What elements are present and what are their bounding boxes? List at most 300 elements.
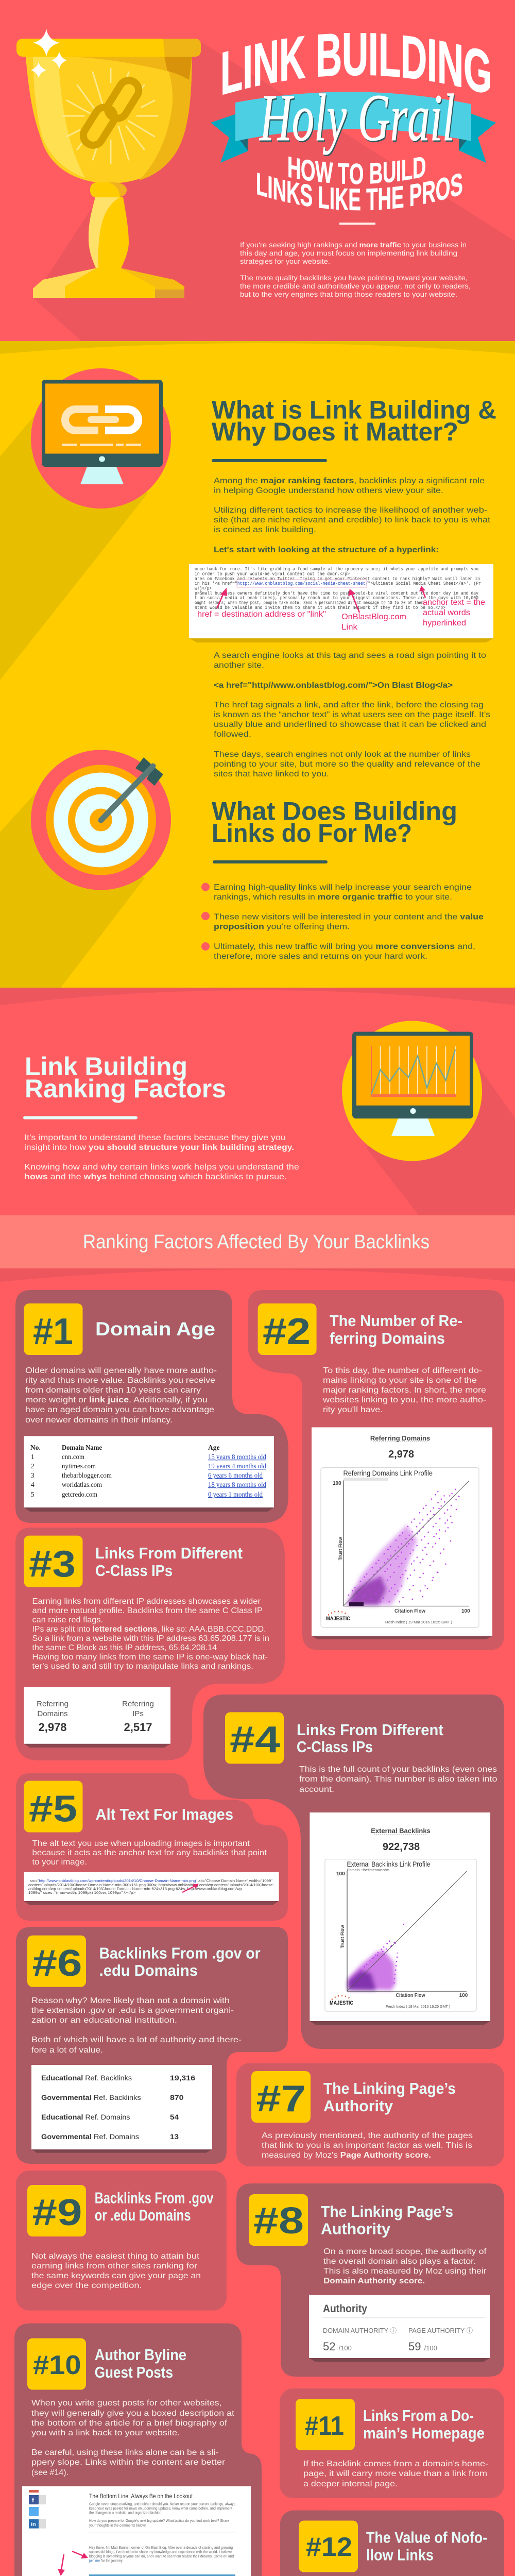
title: Link Building — [220, 20, 492, 108]
card: authority scores — [309, 2295, 490, 2362]
screenshot: alt text code: 1099w" sizes="(max-width: 1099px) 100vw, 1099px" /></p> — [28, 1891, 135, 1895]
table: domain ages: 18 years 8 months old — [208, 1481, 266, 1488]
heading: Guest Posts — [95, 2363, 173, 2381]
chart: external backlinks link profile: 100 — [459, 1993, 468, 1998]
text block: intro: strategies for your website. — [240, 258, 330, 265]
chart: referring domains link profile: 2,978 — [388, 1449, 414, 1460]
subtitle: Links like the pros — [256, 165, 463, 217]
body text: and more natural profile. Backlinks from the same C Class IP — [32, 1606, 263, 1615]
badge #11: #11 — [305, 2411, 344, 2441]
subtitle: How to build — [287, 150, 426, 191]
table: gov and edu backlinks: Governmental Ref. Domains — [41, 2132, 139, 2141]
body text: rity you'll have. — [323, 1405, 383, 1414]
panel: factor 7 linking page authority — [236, 2063, 504, 2166]
screenshot: hyperlink structure: hyperlinked — [423, 619, 466, 628]
badge #4 — [225, 1712, 284, 1764]
panel: factor 5 alt text — [16, 1773, 288, 1921]
screenshot: hyperlink structure: OnBlastBlog.com — [341, 613, 406, 621]
subtitle: Links like the pros: N — [273, 171, 286, 209]
table: gov and edu backlinks: Governmental Ref. Backlinks — [41, 2093, 141, 2102]
heading: .edu Domains — [99, 1961, 198, 1979]
body text: ppery slope. Links within the content are better — [31, 2458, 226, 2467]
heading: or .edu Domains — [95, 2206, 191, 2224]
body text: Not always the easiest thing to attain but — [31, 2252, 200, 2261]
panel: factor 11 homepage links — [280, 2388, 504, 2498]
table: domain ages: worldatlas.com — [62, 1481, 102, 1488]
icon: target with arrow — [31, 750, 171, 890]
badge #12 — [299, 2520, 358, 2572]
heading: what is link building — [212, 396, 496, 462]
table: domain ages: 4 — [31, 1481, 35, 1488]
bullet list: benefits: These new visitors will be interested in your content and the value — [214, 913, 484, 921]
chart: external backlinks link profile: 100 — [336, 1871, 345, 1877]
stats: referring domains and IPs: IPs — [132, 1709, 144, 1718]
text block: anchor text explanation: pointing to your site, but more so the quality and relevance of the — [214, 760, 480, 769]
body text: the same C Block as this IP address, 65.64.208.14 — [32, 1643, 217, 1652]
text block: what is link building: is coined as link building. — [214, 526, 316, 534]
body text: The alt text you use when uploading images is important — [32, 1839, 250, 1848]
table: gov and edu backlinks: Educational Ref. Backlinks — [41, 2074, 132, 2082]
heading — [363, 2406, 485, 2442]
body text — [25, 1366, 217, 1425]
stats: referring domains and IPs: 2,978 — [38, 1721, 67, 1734]
title: Link Building: I — [243, 32, 253, 102]
badge #3: #3 — [29, 1544, 76, 1585]
body text: they will generally give you a boxed description at — [31, 2409, 235, 2418]
body text — [299, 1765, 497, 1794]
text block: anchor text explanation: The href tag signals a link, and after the link, before the closing tag — [214, 701, 484, 709]
body text: account. — [299, 1785, 334, 1794]
table: gov and edu backlinks: 19,316 — [170, 2074, 195, 2082]
title: Link Building: B — [316, 20, 342, 90]
chart: referring domains link profile: Fresh Index ( 19 Mar 2016 16:25 GMT ) — [385, 1621, 452, 1624]
body text: When you write guest posts for other websites, — [31, 2399, 221, 2408]
subtitle: Links like the pros: L — [318, 180, 330, 216]
table: domain ages: No. — [30, 1444, 41, 1451]
body text: Older domains will generally have more autho- — [25, 1366, 217, 1375]
badge #2: #2 — [263, 1311, 311, 1352]
screenshot: alt text code — [24, 1872, 279, 1905]
subtitle: How to build: B — [369, 157, 383, 190]
heading: Backlinks From .gov or — [99, 1944, 261, 1962]
screenshot: alt text code: src="http://www.onblastblog.com/wp-content/uploads/2014/10/Choose-Domain-Name-min.png " alt="Choose Domain Name" width="1099" — [30, 1879, 273, 1883]
subtitle: Links like the pros: T — [366, 182, 378, 217]
body text: If the Backlink comes from a domain's home- — [303, 2460, 488, 2468]
body text: to your image. — [32, 1858, 87, 1867]
table: gov and edu backlinks: 54 — [170, 2113, 179, 2121]
body text: On a more broad scope, the authority of — [323, 2247, 487, 2256]
screenshot: hyperlink structure: p>Small business owners definitely don't have the time to push would-be viral content out the door day in and day — [195, 591, 479, 596]
body text: To this day, the number of different do- — [323, 1366, 482, 1375]
text block: ranking factors intro — [24, 1133, 299, 1181]
text block: anchor text explanation: is known as the “anchor text” is what users see on the page itself. It's — [214, 710, 490, 719]
chart: external backlinks link profile: Citation Flow — [396, 1993, 425, 1998]
table: gov and edu backlinks: 13 — [170, 2132, 179, 2141]
title: Link Building: K — [279, 23, 305, 94]
title: Link Building: U — [342, 21, 368, 88]
subtitle: How to build: U — [383, 156, 396, 190]
body text: websites linking to you, the more autho- — [322, 1396, 486, 1404]
text block: what is link building: Among the major ranking factors , backlinks play a significant role — [214, 477, 485, 485]
heading: Alt Text For Images — [96, 1805, 233, 1823]
panel: factor 8 domain authority — [236, 2183, 504, 2377]
body text — [262, 2131, 473, 2160]
body text: a deeper internal page. — [303, 2480, 398, 2488]
screenshot: hyperlink structure: href = destination address or "link" — [197, 610, 326, 619]
table: domain ages: getcredo.com — [62, 1490, 97, 1498]
heading: what does building links do: Links do For Me? — [212, 819, 412, 848]
body text — [323, 2247, 487, 2285]
title: Link Building: N — [253, 27, 279, 99]
body text — [322, 1366, 486, 1414]
heading — [95, 1544, 243, 1580]
heading — [95, 2346, 186, 2381]
bullet list: benefits: Earning high-quality links will help increase your search engine — [214, 883, 472, 892]
body text — [303, 2460, 488, 2488]
screenshot: author bio: in — [31, 2521, 36, 2528]
badge #9 — [27, 2185, 86, 2236]
subtitle: How to build: D — [413, 150, 426, 185]
chart: referring domains link profile: Referring Domains — [370, 1434, 430, 1442]
body text: you with a link back to your website. — [31, 2429, 180, 2437]
body text: ter's used to and still try to manipulate links and rankings. — [32, 1662, 253, 1671]
body text: over newer domains in their infancy. — [25, 1416, 173, 1425]
badge #1: #1 — [33, 1311, 73, 1352]
heading: Backlinks From .gov — [95, 2189, 214, 2207]
heading — [99, 1944, 261, 1979]
screenshot: hyperlink structure — [189, 564, 493, 642]
text block: intro: The more quality backlinks you have pointing toward your website, — [240, 274, 468, 282]
heading — [95, 2189, 214, 2224]
icon: monitor with link — [31, 368, 171, 509]
panel: factor 2 referring domains — [248, 1290, 504, 1650]
icon: monitor with line chart — [342, 1021, 482, 1161]
screenshot: hyperlink structure: ntent would be valuable and invite them to share it with their network if they find it to be so.</p> — [195, 605, 445, 611]
table: domain ages: Domain Name — [62, 1444, 102, 1451]
body text: from the domain). This number is also taken into — [299, 1775, 497, 1784]
table: domain ages: nytimes.com — [62, 1462, 96, 1470]
screenshot: author bio: Google never stops evolving, and neither should you. Never rest on your current rankings, always — [89, 2503, 235, 2506]
badge #5 — [24, 1781, 82, 1832]
heading — [366, 2529, 487, 2564]
chart: external backlinks link profile: Fresh Index ( 19 Mar 2016 16:25 GMT ) — [386, 2005, 450, 2009]
text block: anchor text explanation: <a href="http//www.onblastblog.com/">On Blast Blog</a> — [214, 681, 453, 690]
body text: earning links from other sites ranking for — [31, 2262, 198, 2270]
chart: external backlinks link profile: External Backlinks — [371, 1827, 431, 1835]
subtitle: Links like the pros: H — [378, 181, 391, 216]
heading — [330, 1312, 462, 1347]
body text: Both of which will have a lot of authority and there- — [31, 2036, 242, 2044]
heading: ferring Domains — [330, 1329, 445, 1347]
screenshot: author bio: join me for the journey. — [89, 2560, 123, 2563]
screenshot: hyperlink structure: in his '<a href="http://www.onblastblog.com/social-media-cheat-sheet/">Ultimate Social Media Cheat Sheet</a>'. (Pr — [195, 581, 481, 586]
text block: anchor text explanation — [214, 651, 490, 778]
heading — [323, 2079, 456, 2115]
screenshot: author bio: the changes in a realistic, and organized fashion. — [89, 2511, 162, 2515]
heading: Links From Different — [297, 1721, 443, 1739]
stats: referring domains and IPs — [24, 1687, 170, 1748]
heading: llow Links — [366, 2546, 434, 2564]
text block: intro: this day and age, you must focus on implementing link building — [240, 249, 457, 257]
table: domain ages — [24, 1436, 274, 1512]
chart: external backlinks link profile: 922,738 — [383, 1841, 420, 1853]
heading: what does building links do — [212, 796, 457, 863]
heading: link building ranking factors: Ranking Factors — [25, 1074, 226, 1103]
badge #12: #12 — [306, 2532, 352, 2562]
body text: IPs are split into lettered sections, like so: AAA.BBB.CCC.DDD. — [32, 1625, 266, 1634]
card: authority scores: Authority — [323, 2303, 367, 2315]
subtitle: Links like the pros: P — [409, 176, 422, 213]
body text: mains linking to your site is one of the — [323, 1376, 477, 1385]
chart: referring domains link profile — [312, 1427, 492, 1639]
heading: Authority — [323, 2097, 393, 2115]
heading: main’s Homepage — [363, 2424, 485, 2442]
table: domain ages: cnn.com — [62, 1453, 84, 1461]
screenshot: hyperlink structure: anchor text = the — [423, 598, 485, 607]
body text: major ranking factors. In short, the more — [323, 1386, 486, 1395]
chart: referring domains link profile: Citation Flow — [394, 1608, 425, 1614]
screenshot: hyperlink structure: w!)</p> — [195, 586, 212, 591]
heading — [321, 2202, 453, 2238]
table: gov and edu backlinks: Educational Ref. Domains — [41, 2113, 130, 2121]
stats: referring domains and IPs: Referring — [122, 1700, 154, 1708]
body text: the bottom of the article for a brief biography of — [31, 2419, 228, 2428]
text block: anchor text explanation: followed. — [214, 730, 251, 739]
bullet list: benefits: proposition you're offering them. — [214, 922, 350, 931]
body text: measured by Moz's Page Authority score. — [262, 2151, 431, 2160]
ribbon banner — [211, 92, 496, 163]
text block: ranking factors intro: insight into how you should structure your link building strategy. — [24, 1143, 294, 1152]
subtitle: Links like the pros: I — [267, 170, 273, 206]
chart: referring domains link profile: 100 — [333, 1481, 341, 1486]
screenshot: hyperlink structure: Link — [341, 623, 357, 632]
heading: Author Byline — [95, 2346, 186, 2364]
title: Link Building: D — [401, 22, 427, 93]
body text: page, it will carry more value than a link from — [303, 2469, 487, 2478]
chart: referring domains link profile: Trust Flow — [338, 1537, 343, 1560]
subtitle: How to build: T — [338, 158, 349, 191]
badge #7 — [251, 2071, 311, 2123]
screenshot: hyperlink structure: ought leaders; when they post, people take note. Send a personalized direct message to 10 to 20 of them — [195, 601, 423, 606]
body text — [31, 1996, 242, 2055]
screenshot: hyperlink structure: t on social media at peak times), personally reach out to your biggest connectors. These are the guys with 10,000 — [195, 596, 478, 601]
table: domain ages: 0 years 1 months old — [208, 1490, 263, 1498]
screenshot: hyperlink structure: actual words — [423, 608, 470, 617]
stats: referring domains and IPs: 2,517 — [124, 1721, 152, 1734]
banner: ranking factors affected: Ranking Factors Affected By Your Backlinks — [83, 1231, 430, 1253]
bullet list: benefits: rankings, which results in more organic traffic to your site. — [214, 893, 452, 902]
screenshot: author bio: keep your eyes peeled for news on upcoming updates, know what came before, and implement — [89, 2507, 232, 2511]
body text: Earning links from different IP addresses showcases a wider — [32, 1597, 261, 1606]
screenshot: hyperlink structure: ares on Facebook and retweets on Twitter. Trying to get your Pinterest content to rank highly? Wait until later in — [195, 577, 480, 582]
badge #8 — [249, 2194, 308, 2246]
card: authority scores: DOMAIN AUTHORITY ⓘ — [323, 2327, 397, 2334]
text block: anchor text explanation: usually blue and underlined to showcase that it can be clicked and — [214, 720, 486, 729]
table: domain ages: 1 — [31, 1453, 35, 1461]
body text: more weight or link juice . Additionally, if you — [25, 1396, 208, 1404]
bullet list: benefits: therefore, more sales and returns on your hard work. — [214, 952, 427, 961]
subtitle: Links like the pros: O — [436, 170, 450, 208]
chart: external backlinks link profile: External Backlinks Link Profile — [347, 1860, 431, 1868]
heading: The Linking Page’s — [323, 2079, 456, 2097]
body text: As previously mentioned, the authority of the pages — [262, 2131, 473, 2140]
text block: anchor text explanation: another site. — [214, 661, 264, 670]
text block: intro: but to the very engines that bring those readers to your website. — [240, 291, 457, 298]
title: Link Building: I — [427, 26, 437, 95]
badge #6: #6 — [32, 1943, 82, 1984]
screenshot: hyperlink structure: in order to push your would-be viral content out the door.</p> — [195, 572, 350, 577]
text block: intro: the more credible and authoritative you appear, not only to readers, — [240, 282, 471, 290]
body text — [31, 2252, 201, 2290]
body text: have an aged domain you can have advantage — [25, 1405, 214, 1414]
subtitle: Links like the pros: I — [330, 181, 335, 216]
body text: from domains older than 10 years can carry — [25, 1386, 201, 1395]
heading: what is link building: What is Link Building & — [212, 396, 496, 425]
text block: what is link building: Utilizing different tactics to increase the likelihood of another web- — [214, 506, 487, 515]
body text: that link to you is an important factor as well. This is — [262, 2141, 472, 2150]
table: gov and edu backlinks — [31, 2065, 212, 2153]
subtitle: How to build: H — [287, 150, 301, 186]
body text — [32, 1839, 267, 1867]
heading: link building ranking factors — [23, 1052, 226, 1119]
text block: what is link building: in helping Google understand how others view your site. — [214, 486, 443, 495]
chart: referring domains link profile: MAJESTIC — [326, 1616, 350, 1622]
badge #10 — [27, 2338, 86, 2389]
text block: ranking factors intro: Knowing how and why certain links work helps you understand the — [24, 1163, 299, 1172]
heading: Links From a Do- — [363, 2406, 474, 2425]
body text: Having too many links from the same IP is one-way black hat- — [32, 1653, 268, 1662]
title: Link Building: N — [437, 27, 464, 100]
bullet list: benefits — [201, 883, 484, 961]
subtitle: How to build: I — [396, 155, 401, 188]
subtitle: How to build: L — [401, 153, 413, 188]
heading: The Number of Re- — [330, 1312, 462, 1330]
subtitle: Links like the pros: S — [300, 177, 313, 214]
stats: referring domains and IPs: Domains — [37, 1709, 68, 1718]
chart: referring domains link profile: 100 — [461, 1608, 470, 1614]
badge #6 — [27, 1936, 86, 1987]
body text: So a link from a website with this IP address 63.65.208.177 is in — [32, 1634, 269, 1643]
chart: external backlinks link profile: Domain : thetimenow.com — [347, 1868, 389, 1872]
panel: factor 12 nofollow links — [280, 2511, 504, 2576]
text block: anchor text explanation: sites that have linked to you. — [214, 770, 329, 778]
icon: golden grail — [16, 29, 201, 298]
screenshot: author bio: How do you prepare for Google's next big update? What tactics do you find work best? Share — [89, 2519, 229, 2523]
body text: the extension .gov or .edu is a government organi- — [31, 2006, 234, 2015]
panel: factor 6 gov edu domains — [16, 1927, 288, 2164]
body text: zation or an educational institution. — [31, 2016, 177, 2025]
panel: factor 9 backlinks from ranking pages — [16, 2171, 227, 2311]
table: domain ages: 3 — [31, 1471, 35, 1479]
chart: external backlinks link profile — [310, 1812, 490, 2025]
text block: intro: If you're seeking high rankings and more traffic to your business in — [240, 241, 467, 249]
screenshot: alt text code: astblog.com/wp-content/uploads/2014/10/Choose-Domain-Name-min-624x313.png 624w, http://www.onblastblog.com/wp- — [28, 1888, 244, 1891]
screenshot: author bio: Hey there, I'm Matt Banner, owner of On Blast Blog. After over a decade of starting and growing — [89, 2546, 233, 2550]
table: domain ages: 19 years 4 months old — [208, 1462, 266, 1470]
text block: what is link building — [214, 477, 491, 554]
subtitle: Links like the pros: E — [348, 182, 361, 217]
table: domain ages: 15 years 8 months old — [208, 1453, 266, 1461]
card: authority scores: 59 /100 — [408, 2340, 437, 2353]
chart: referring domains link profile: Referring Domains Link Profile — [343, 1469, 433, 1477]
badge #5: #5 — [29, 1789, 77, 1830]
screenshot: author bio: blogging is something anyone can do, and I want to see them realize their dreams. Come on and — [89, 2555, 234, 2558]
subtitle: How to build: O — [349, 158, 364, 191]
bullet list: benefits: Ultimately, this new traffic will bring you more conversions and, — [214, 942, 475, 951]
heading: Domain Age — [95, 1318, 215, 1340]
badge #2 — [258, 1303, 317, 1355]
screenshot: author bio — [22, 2486, 251, 2576]
title: Link Building: L — [379, 21, 401, 90]
table: domain ages: 5 — [31, 1490, 35, 1498]
subtitle: Links like the pros: L — [256, 165, 267, 204]
screenshot: alt text code: content/uploads/2014/10/Choose-Domain-Name-min-300x151.png 300w, http://www.onblastblog.com/wp-content/uploads/2014/10/Choose- — [28, 1884, 274, 1887]
screenshot: author bio: f — [32, 2497, 35, 2504]
screenshot: author bio: successful blogs, I've decided to share my knowledge and experience with the world. I believe — [89, 2550, 232, 2554]
body text: the same keywords can give your page an — [31, 2272, 201, 2280]
body text: the overall domain also plays a factor. — [323, 2257, 476, 2266]
body text: This is also measured by Moz using their — [323, 2267, 487, 2276]
body text — [31, 2399, 235, 2477]
table: domain ages: 6 years 6 months old — [208, 1471, 263, 1479]
subtitle: Links like the pros: E — [391, 179, 404, 215]
heading: The Value of Nofo- — [366, 2529, 487, 2547]
text block: anchor text explanation: These days, search engines not only look at the number of links — [214, 750, 471, 759]
badge #1 — [24, 1303, 82, 1355]
body text: Be careful, using these links alone can be a sli- — [31, 2448, 218, 2457]
heading — [297, 1721, 443, 1756]
subtitle: Links like the pros: S — [450, 165, 463, 205]
panel: factor 10 author byline — [14, 2324, 262, 2576]
heading: link building ranking factors: Link Building — [25, 1052, 187, 1081]
body text — [32, 1597, 269, 1671]
title: Link Building: G — [464, 33, 492, 108]
subtitle: How to build: W — [315, 156, 333, 190]
title: Link Building: L — [220, 35, 243, 108]
card: authority scores: PAGE AUTHORITY ⓘ — [408, 2327, 473, 2334]
card: authority scores: 52 /100 — [323, 2340, 352, 2353]
badge #3 — [24, 1536, 82, 1587]
text block: what is link building: site (that are niche relevant and credible) to link back to you is what — [214, 516, 491, 524]
heading: what does building links do: What Does Building — [212, 796, 457, 825]
text block: intro — [240, 241, 471, 298]
body text: edge over the competition. — [31, 2281, 142, 2290]
heading: Links From Different — [95, 1544, 243, 1562]
body text: rity and thus more value. Backlinks you receive — [25, 1376, 215, 1385]
text block: anchor text explanation: A search engine looks at this tag and sees a road sign pointing it to — [214, 651, 486, 660]
badge #7: #7 — [256, 2078, 306, 2120]
table: domain ages: 2 — [31, 1462, 35, 1470]
heading: C-Class IPs — [297, 1738, 373, 1756]
panel: factor 3 c-class IPs — [15, 1528, 285, 1760]
panel: factor 1 domain age — [15, 1290, 288, 1523]
badge #4: #4 — [230, 1719, 280, 1760]
stats: referring domains and IPs: Referring — [37, 1700, 68, 1708]
subtitle: Links like the pros: K — [335, 181, 348, 217]
body text: fore a lot of value. — [31, 2046, 103, 2055]
chart: external backlinks link profile: MAJESTIC — [330, 2000, 353, 2006]
title: Link Building: I — [368, 21, 379, 88]
badge #8: #8 — [253, 2200, 304, 2242]
screenshot: author bio: your thoughts in the comments below! — [89, 2524, 146, 2528]
table: domain ages: thebarblogger.com — [62, 1471, 112, 1479]
badge #9: #9 — [32, 2192, 82, 2233]
badge #11 — [296, 2399, 355, 2450]
banner: ranking factors affected — [0, 1215, 515, 1268]
subtitle: Links like the pros: K — [286, 174, 300, 212]
panel: factor 4 backlink count — [203, 1694, 504, 2049]
body text: Domain Authority score. — [323, 2277, 425, 2285]
